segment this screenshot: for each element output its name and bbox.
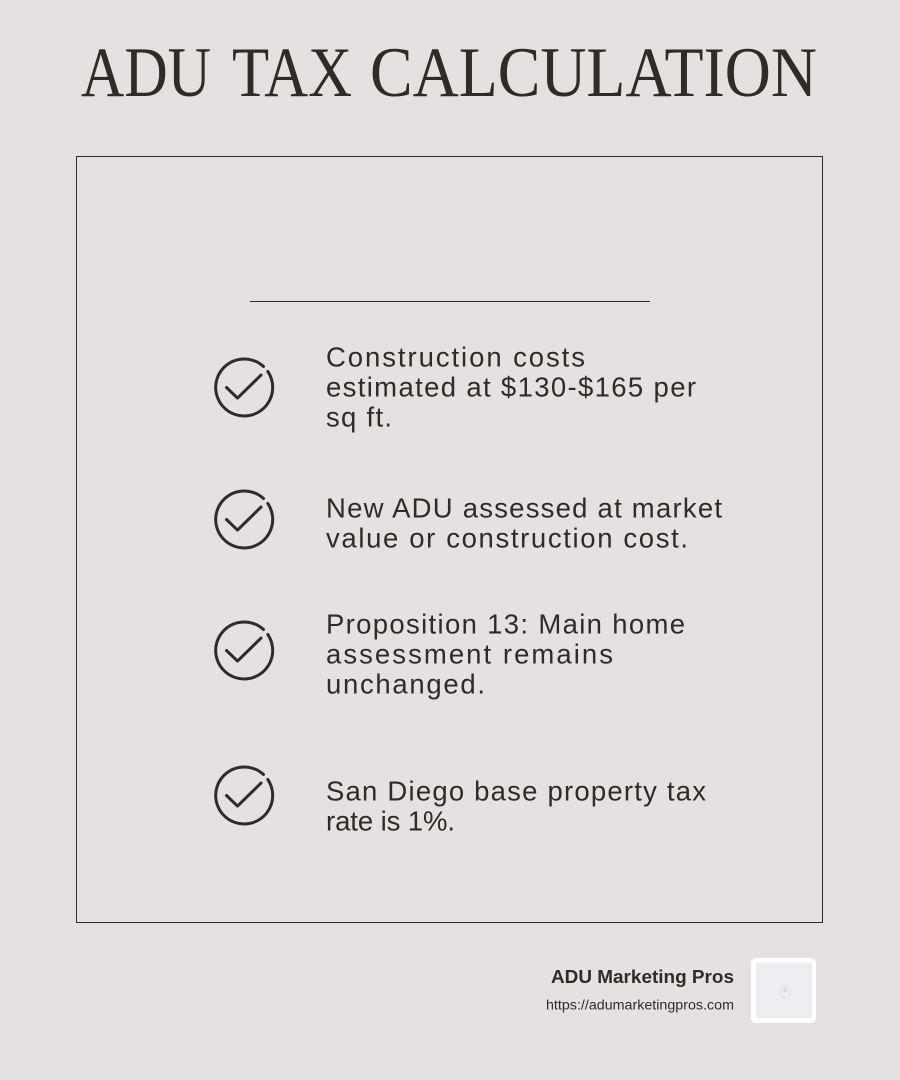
text: Proposition 13: Proposition 13: Main home [326,608,685,640]
text: construction costs: Construction costs [326,342,585,372]
text: Proposition 13 [326,608,685,700]
panel: checklist frame [76,156,822,922]
text: construction costs: sq ft. [326,402,392,432]
icon: check circle [216,622,273,679]
text: construction costs [326,342,696,432]
text: new ADU assessment: value or construction cost. [326,522,688,554]
brand url: https://adumarketingpros.com [546,998,734,1012]
text: new ADU assessment [326,492,722,554]
logo tile [751,958,816,1023]
footer: brand [546,958,816,1023]
text: Proposition 13: assessment remains [326,638,613,670]
checklist item: San Diego tax rate [216,767,706,836]
text: San Diego tax rate [326,776,706,836]
text: San Diego tax rate: rate is 1%. [326,806,455,836]
checklist item: new ADU assessment [216,491,722,554]
title: ADU [81,34,211,112]
icon: check circle [216,767,273,824]
title: TAX [232,34,352,112]
text: construction costs: estimated at $130-$165 per [326,372,696,402]
icon: check circle [216,491,273,548]
checklist item: construction costs [216,342,696,432]
text: new ADU assessment: New ADU assessed at market [326,492,722,524]
title [81,34,817,112]
text: San Diego tax rate: San Diego base property tax [326,776,706,806]
text: Proposition 13: unchanged. [326,668,485,700]
title: CALCULATION [370,34,817,112]
icon: check circle [216,359,273,416]
brand name: ADU Marketing Pros [551,967,734,987]
checklist item: Proposition 13 [216,608,685,700]
